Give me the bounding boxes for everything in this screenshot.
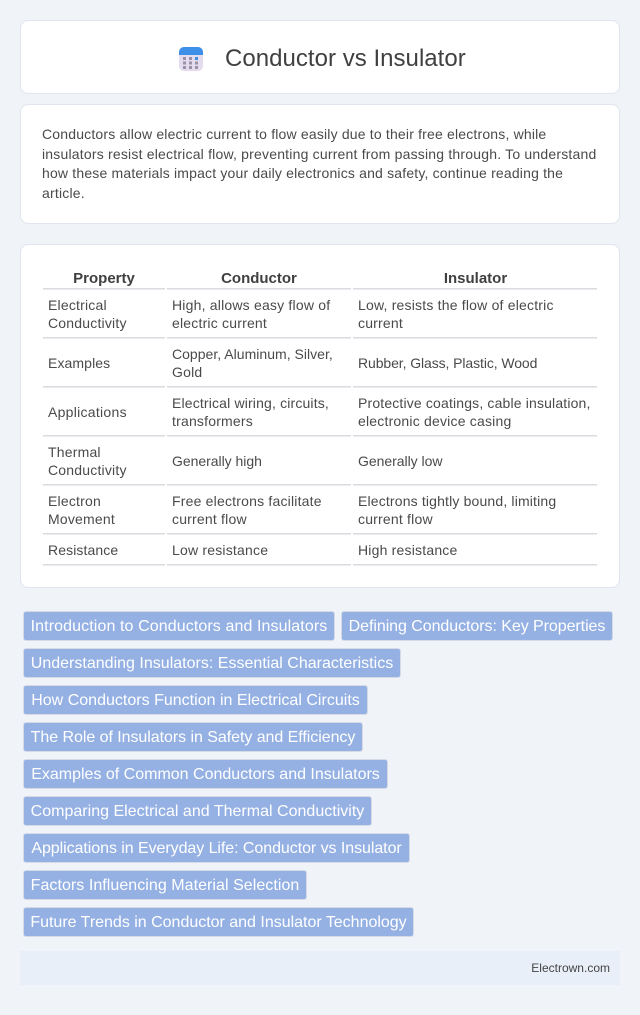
intro text panel bbox=[20, 104, 620, 224]
tag: How Conductors Function in Electrical Circuits bbox=[31, 692, 360, 709]
table: Examples bbox=[48, 355, 110, 371]
table: Free electrons facilitate bbox=[172, 493, 322, 509]
comparison table panel bbox=[20, 244, 620, 588]
table: Generally low bbox=[358, 453, 442, 469]
table: Low resistance bbox=[172, 542, 268, 558]
table: Generally high bbox=[172, 453, 262, 469]
tag: Defining Conductors: Key Properties bbox=[349, 618, 605, 635]
tag: Introduction to Conductors and Insulators bbox=[31, 618, 327, 635]
table: High resistance bbox=[358, 542, 458, 558]
table: Rubber, Glass, Plastic, Wood bbox=[358, 355, 537, 371]
table: Protective coatings, cable insulation, bbox=[358, 395, 591, 411]
table: electric current bbox=[172, 315, 267, 331]
title: Conductor vs Insulator bbox=[225, 45, 466, 72]
table: transformers bbox=[172, 413, 253, 429]
tag: Comparing Electrical and Thermal Conductivity bbox=[31, 803, 364, 820]
table: Conductivity bbox=[48, 315, 127, 331]
table: current flow bbox=[358, 511, 433, 527]
tag: Future Trends in Conductor and Insulator Technology bbox=[30, 914, 407, 931]
table: Electrical bbox=[48, 297, 107, 313]
table headers: Insulator bbox=[444, 270, 507, 287]
table: Copper, Aluminum, Silver, bbox=[172, 346, 333, 362]
tag bbox=[341, 611, 613, 641]
footer bbox=[20, 951, 620, 985]
tag bbox=[23, 907, 414, 937]
tag bbox=[23, 648, 401, 678]
table: Electrons tightly bound, limiting bbox=[358, 493, 556, 509]
table: Electron bbox=[48, 493, 101, 509]
table: High, allows easy flow of bbox=[172, 297, 330, 313]
table: Resistance bbox=[48, 542, 118, 558]
intro paragraph: Conductors allow electric current to flow easily due to their free electrons, while bbox=[42, 126, 546, 142]
intro paragraph bbox=[42, 126, 596, 200]
topic tags bbox=[23, 611, 613, 937]
tag bbox=[23, 611, 335, 641]
table: Movement bbox=[48, 511, 115, 527]
tag: Factors Influencing Material Selection bbox=[31, 877, 299, 894]
table: Low, resists the flow of electric bbox=[358, 297, 554, 313]
table headers bbox=[73, 270, 507, 287]
tag bbox=[23, 833, 410, 863]
intro paragraph: how these materials impact your daily electronics and safety, continue reading the bbox=[42, 165, 563, 181]
table: Thermal bbox=[48, 444, 101, 460]
tag bbox=[23, 759, 388, 789]
table: current flow bbox=[172, 511, 247, 527]
tag bbox=[23, 870, 307, 900]
tag: The Role of Insulators in Safety and Efficiency bbox=[31, 729, 355, 746]
table: Electrical wiring, circuits, bbox=[172, 395, 329, 411]
tag bbox=[23, 685, 368, 715]
table: current bbox=[358, 315, 403, 331]
tag: Applications in Everyday Life: Conductor vs Insulator bbox=[31, 840, 402, 857]
intro paragraph: insulators resist electrical flow, preventing current from passing through. To understand bbox=[42, 146, 596, 162]
tag: Examples of Common Conductors and Insulators bbox=[31, 766, 380, 783]
icon: calendar bbox=[179, 47, 203, 71]
table bbox=[43, 270, 597, 566]
table: electronic device casing bbox=[358, 413, 511, 429]
table headers: Conductor bbox=[221, 270, 297, 287]
tag bbox=[23, 722, 363, 752]
tag: Understanding Insulators: Essential Characteristics bbox=[31, 655, 393, 672]
footer source: Electrown.com bbox=[531, 961, 610, 975]
table: Conductivity bbox=[48, 462, 127, 478]
tag bbox=[23, 796, 372, 826]
intro paragraph: article. bbox=[42, 184, 85, 200]
title card bbox=[20, 20, 620, 94]
table: Gold bbox=[172, 364, 202, 380]
table headers: Property bbox=[73, 270, 135, 287]
table: Applications bbox=[48, 404, 127, 420]
